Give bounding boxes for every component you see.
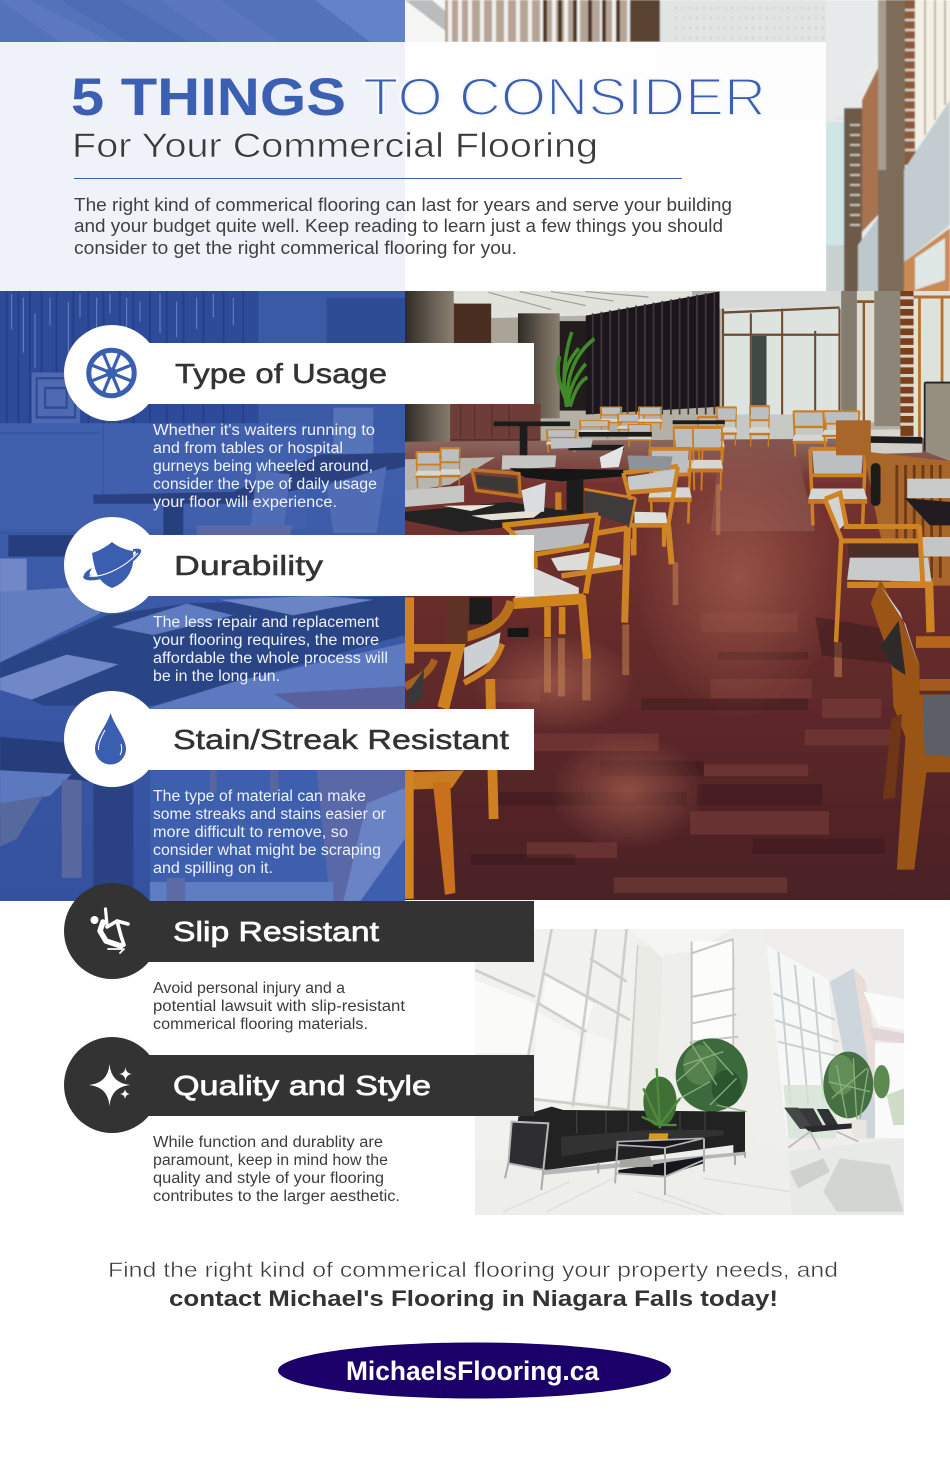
far table tops: [494, 420, 725, 455]
text block: more difficult to remove, so: [153, 824, 348, 841]
text block: affordable the whole process will: [153, 650, 388, 667]
text block: [153, 614, 388, 685]
text block: The less repair and replacement: [153, 614, 380, 631]
text block: consider what might be scraping: [153, 842, 381, 859]
text block: consider the type of daily usage: [153, 476, 377, 493]
intro text: [74, 195, 732, 258]
lobby photo: [470, 925, 910, 1218]
title: [71, 68, 766, 127]
text block: [153, 422, 377, 511]
text block: Avoid personal injury and a: [153, 980, 345, 997]
text block: [153, 980, 406, 1033]
intro text: and your budget quite well. Keep reading to learn just a few things you should: [74, 216, 723, 236]
small plant and pot: [642, 1068, 680, 1143]
text block: [153, 788, 386, 877]
heading: Type of Usage: [175, 358, 387, 389]
heading: Quality and Style: [173, 1070, 431, 1101]
large chair front: [502, 515, 598, 659]
logo: MichaelsFlooring.ca: [346, 1356, 600, 1386]
foreground left chairs: [405, 601, 511, 899]
text block: quality and style of your flooring: [153, 1170, 384, 1187]
plants: [676, 1038, 890, 1118]
background photo: upper atrium: [405, 0, 950, 300]
icon: person slipping: [90, 909, 128, 953]
logo: [278, 1342, 671, 1398]
restaurant photo with tables, chairs and polished wood floor: [405, 290, 950, 900]
text block: contributes to the larger aesthetic.: [153, 1188, 400, 1205]
closing call to action: Find the right kind of commerical flooring your property needs, and: [108, 1259, 838, 1282]
item: Durability: [64, 517, 534, 685]
chair: light back: [623, 466, 678, 564]
item: Stain/Streak Resistant: [64, 691, 534, 877]
closing call to action: contact Michael's Flooring in Niagara Falls today!: [169, 1286, 778, 1311]
icon: wheel: [89, 350, 134, 396]
text block: and from tables or hospital: [153, 440, 343, 457]
coffee table: [615, 1138, 704, 1195]
left backing of header panel: [0, 42, 405, 291]
floor planks: [488, 613, 892, 893]
floor: [470, 1138, 904, 1218]
text block: some streaks and stains easier or: [153, 806, 386, 823]
intro text: consider to get the right commerical flooring for you.: [74, 238, 517, 258]
text block: [153, 1134, 400, 1205]
subtitle: For Your Commercial Flooring: [72, 127, 598, 165]
title: 5 THINGS: [71, 68, 346, 127]
text block: commerical flooring materials.: [153, 1016, 368, 1033]
item: Quality and Style: [64, 1037, 534, 1205]
icon: sparkles: [89, 1064, 132, 1106]
closing call to action: [108, 1259, 838, 1311]
text block: Whether it's waiters running to: [153, 422, 375, 439]
blue band above header: [0, 0, 405, 42]
text block: your flooring requires, the more: [153, 632, 379, 649]
waiting chairs: [784, 1108, 858, 1150]
chair: dark-backed mid left: [472, 470, 561, 510]
intro text: The right kind of commerical flooring can last for years and serve your building: [74, 195, 732, 215]
text block: paramount, keep in mind how the: [153, 1152, 388, 1169]
foreground right chair: [871, 580, 950, 870]
text block: The type of material can make: [153, 788, 366, 805]
right counter: [870, 436, 922, 444]
text block: gurneys being wheeled around,: [153, 458, 373, 475]
icon: water drop: [95, 713, 126, 764]
text block: be in the long run.: [153, 668, 280, 685]
icon: shield with orbit: [83, 542, 141, 588]
chair: dark back: [551, 489, 636, 623]
sofa: [505, 1107, 745, 1190]
far chairs: [415, 452, 441, 488]
item: Slip Resistant: [64, 883, 534, 1033]
title: TO CONSIDER: [363, 68, 766, 127]
item: Type of Usage: [64, 325, 534, 511]
mid tables: [509, 468, 627, 481]
heading: Stain/Streak Resistant: [173, 724, 509, 755]
blue tinted left panel of photo: [0, 290, 405, 903]
heading: Slip Resistant: [173, 916, 379, 947]
right big chair: [825, 493, 933, 642]
header panel: [0, 42, 826, 291]
text block: and spilling on it.: [153, 860, 273, 877]
heading: Durability: [174, 550, 323, 581]
text block: While function and durablity are: [153, 1134, 383, 1151]
text block: your floor will experience.: [153, 494, 337, 511]
text block: potential lawsuit with slip-resistant: [153, 998, 406, 1015]
